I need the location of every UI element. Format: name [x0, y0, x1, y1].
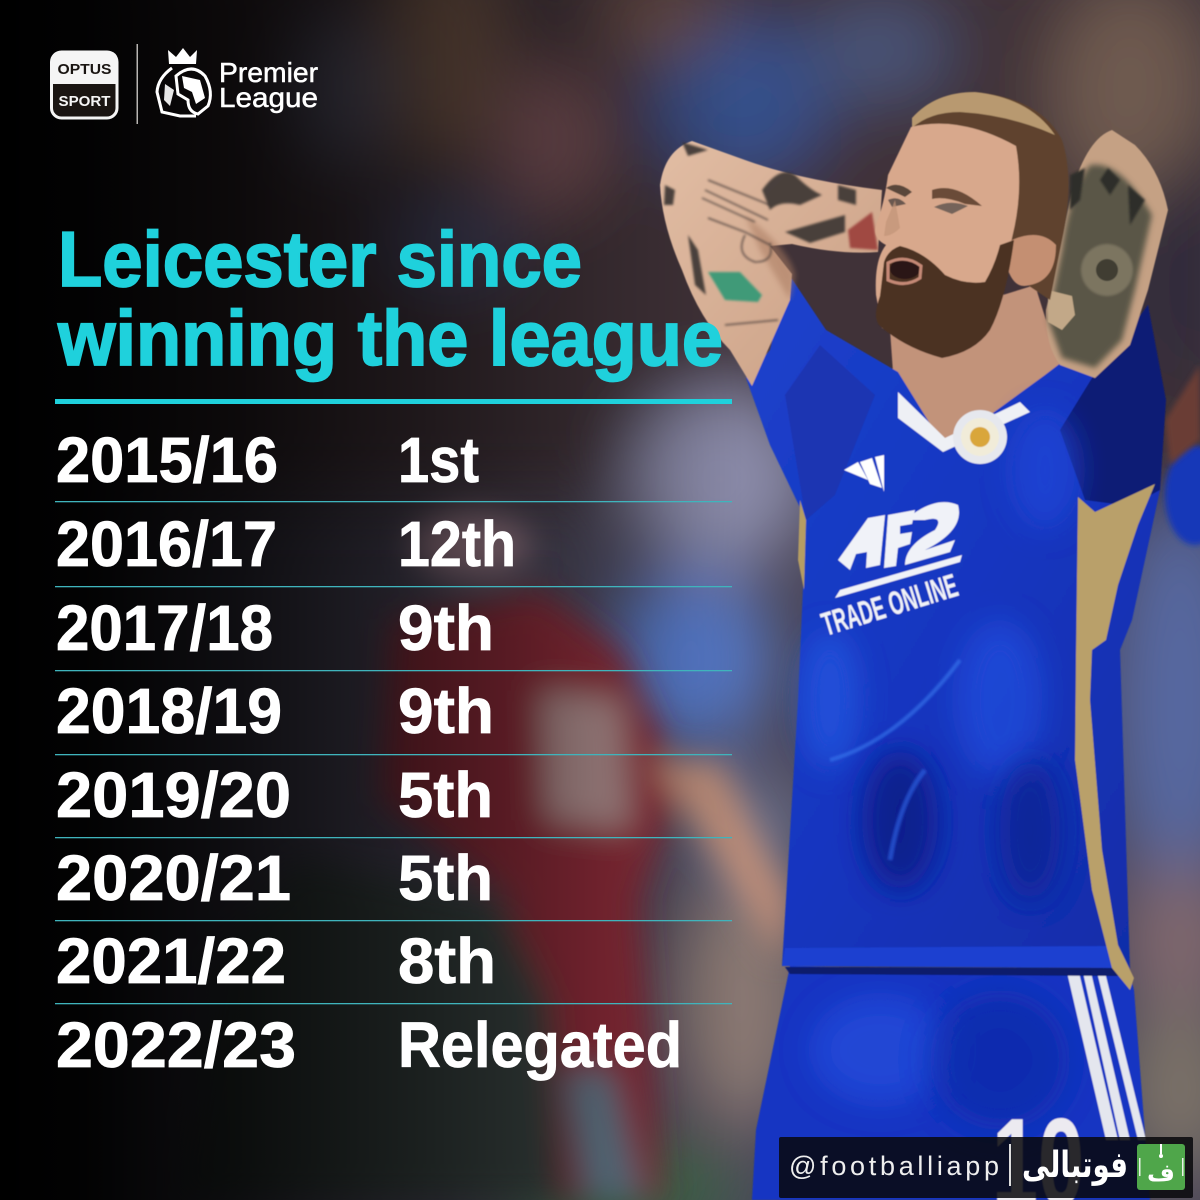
sponsor logo: [835, 502, 962, 598]
logo text: Premier League: [219, 57, 318, 113]
row: 2022/23: [56, 1009, 682, 1081]
row: 2016/17: 2016/17: [56, 508, 277, 580]
ear: [1008, 235, 1056, 286]
sponsor text: TRADE ONLINE: [817, 566, 962, 643]
row: 2018/19: 9th: [398, 675, 494, 747]
green tattoo: [708, 272, 762, 302]
title: [57, 215, 723, 382]
watermark divider: [1009, 1144, 1011, 1186]
collar: [898, 392, 1030, 452]
icon: green pitch app logo: [1137, 1144, 1185, 1190]
row: 2022/23: Relegated: [398, 1009, 682, 1081]
row: 2020/21: 5th: [398, 842, 493, 914]
logo text: Premier League: League: [219, 82, 318, 113]
row: 2016/17: [56, 508, 516, 580]
right arm with tattoos: [1046, 130, 1168, 378]
row: 2017/18: 2017/18: [56, 592, 273, 664]
logo: Optus Sport: [51, 51, 118, 118]
logos: [51, 44, 318, 124]
logo: Premier League lion: [157, 48, 210, 116]
club badge: [953, 410, 1007, 464]
logo text: Premier League: Premier: [219, 57, 318, 88]
row: 2020/21: [56, 842, 493, 914]
row: 2015/16: [56, 424, 479, 496]
three stripes logo: [844, 455, 884, 492]
logo divider: [136, 44, 138, 124]
watermark bar: [779, 1137, 1193, 1198]
logo: Optus Sport: OPTUS: [58, 61, 112, 78]
watermark persian name: فوتبالی: [1022, 1145, 1128, 1186]
row: 2021/22: [56, 925, 496, 997]
icon: green pitch app logo: ف: [1147, 1159, 1175, 1187]
title underline: [55, 399, 732, 404]
lips: [888, 259, 921, 284]
shorts: [752, 966, 1150, 1200]
beard: [876, 240, 1014, 358]
eyes and brows: [884, 185, 982, 236]
mouth: [890, 259, 920, 279]
row: 2016/17: 12th: [398, 508, 516, 580]
left arm with tattoos: [660, 141, 882, 386]
row: 2021/22: 8th: [398, 925, 496, 997]
player: [660, 92, 1168, 1200]
row: 2019/20: 5th: [398, 759, 493, 831]
title: winning the league: [57, 294, 723, 382]
row: 2015/16: 2015/16: [56, 424, 278, 496]
neck: [890, 285, 1060, 450]
row: 2015/16: 1st: [398, 424, 479, 496]
face: [875, 124, 1019, 355]
hair: [912, 92, 1068, 300]
row: 2020/21: 2020/21: [56, 842, 291, 914]
row: 2018/19: 2018/19: [56, 675, 282, 747]
watermark handle: @footballiapp: [789, 1151, 999, 1181]
row dividers: [55, 501, 732, 1004]
row: 2017/18: [56, 592, 494, 664]
row: 2022/23: 2022/23: [56, 1009, 296, 1081]
jersey: [746, 273, 1166, 990]
row: 2019/20: 2019/20: [56, 759, 291, 831]
row: 2021/22: 2021/22: [56, 925, 286, 997]
table of seasons and finishes: [55, 424, 732, 1081]
gold side panel: [1075, 484, 1155, 990]
blurred blue ball shape at right edge: [1165, 445, 1200, 545]
row: 2017/18: 9th: [398, 592, 494, 664]
title: Leicester since: [58, 215, 582, 303]
row: 2018/19: [56, 675, 494, 747]
row: 2019/20: [56, 759, 493, 831]
logo: Optus Sport: SPORT: [58, 93, 110, 110]
